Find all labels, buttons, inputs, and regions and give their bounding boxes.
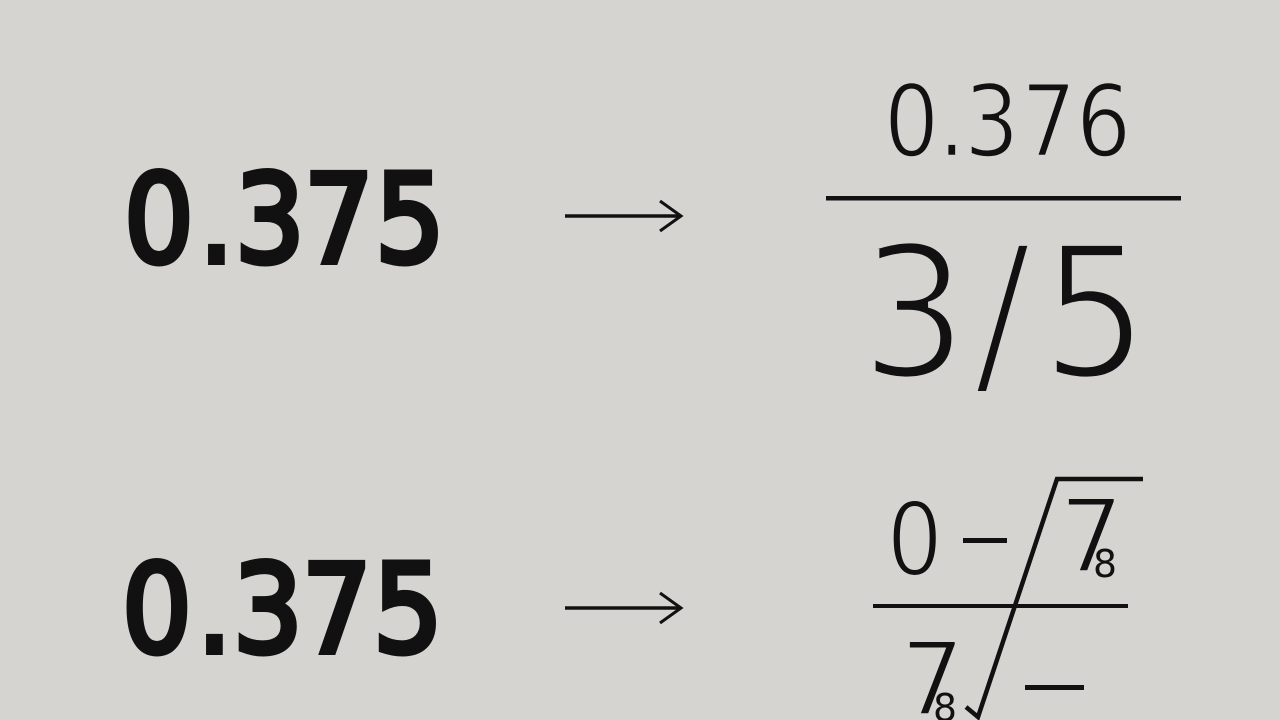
row 1: fraction (826, 64, 1181, 421)
numerator: 0.376 (884, 64, 1131, 181)
radical sign (966, 479, 1143, 717)
denominator minus (1025, 685, 1084, 690)
fraction bar (873, 604, 1128, 608)
denominator: 3/5 (860, 206, 1149, 421)
numerator minus (963, 538, 1007, 543)
numerator seven: 7 (1059, 478, 1124, 597)
row 2: arrow (565, 593, 681, 623)
row 2: radical fraction (873, 478, 1143, 720)
numerator zero: 0 (887, 480, 943, 600)
row 1: arrow (565, 201, 681, 231)
numerator small eight: 8 (1093, 542, 1117, 586)
fraction bar (826, 196, 1181, 200)
row 1: decimal value: 0.375 (124, 150, 445, 291)
row 2: decimal value: 0.375 (122, 540, 443, 681)
